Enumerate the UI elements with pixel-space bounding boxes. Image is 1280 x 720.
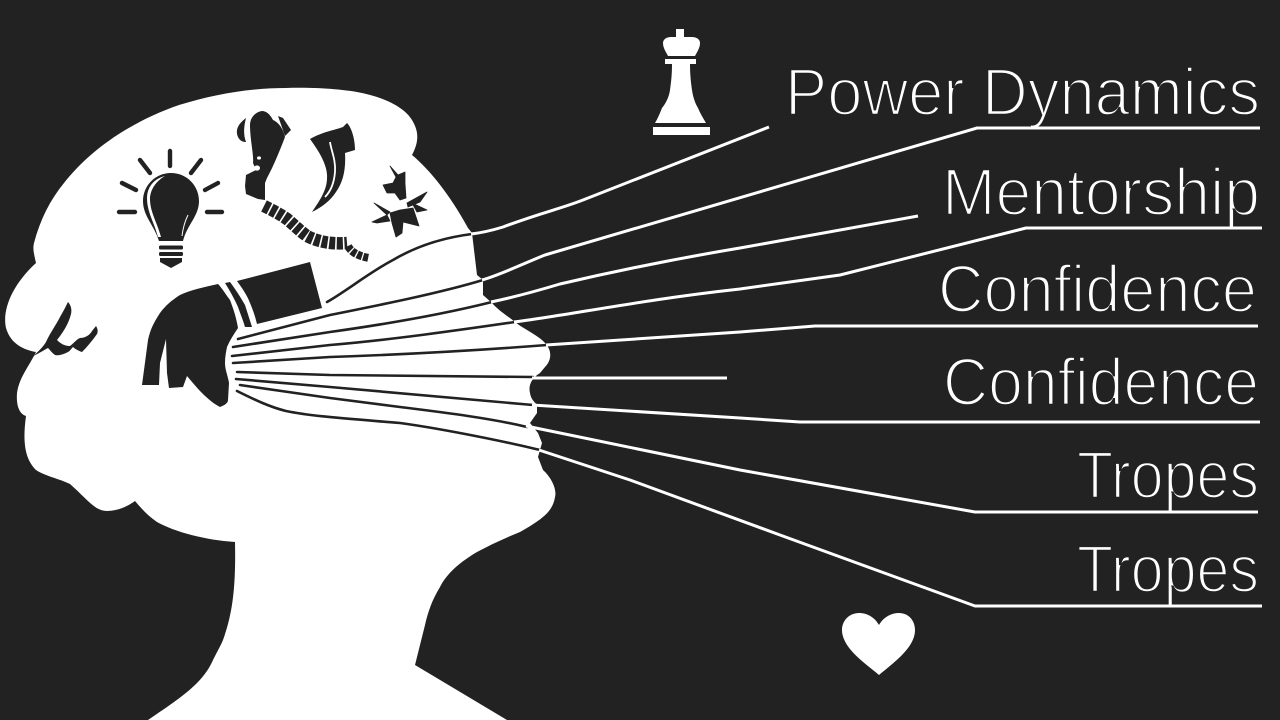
leader line 7 to lower Confidence rule (236, 379, 1260, 422)
icon: raised fist shape (142, 284, 238, 407)
label: Confidence upper: Confidence (938, 252, 1257, 327)
label: Tropes upper: Tropes (1077, 438, 1259, 513)
icon: fang (310, 123, 355, 212)
leader line 6 to lower Confidence (237, 372, 727, 378)
label: Power Dynamics: Power Dynamics (785, 55, 1260, 130)
icon: sleeve cuff (225, 262, 322, 327)
icon: seahorse with segmented tail (237, 111, 369, 258)
label: Tropes lower: Tropes (1077, 532, 1259, 607)
leader line 9 to lower Tropes rule (237, 391, 1262, 606)
icon: light bulb (119, 151, 222, 268)
leader line 1 to Power Dynamics (327, 127, 769, 302)
icon: heart (842, 613, 915, 675)
leader line 3 to Mentorship (233, 216, 918, 347)
leader line 4 to Mentorship rule (232, 228, 1262, 356)
label: Confidence lower: Confidence (943, 345, 1259, 420)
icon: ear curl (33, 302, 98, 356)
leader line 8 to upper Tropes rule (240, 385, 1258, 512)
label: Mentorship: Mentorship (942, 155, 1260, 230)
head silhouette (5, 88, 555, 720)
leader line 2 to Power Dynamics rule (238, 128, 1260, 339)
icon: chess king (653, 29, 710, 135)
icon: flower sprig (372, 166, 427, 237)
leader line 5 to upper Confidence rule (233, 326, 1258, 363)
